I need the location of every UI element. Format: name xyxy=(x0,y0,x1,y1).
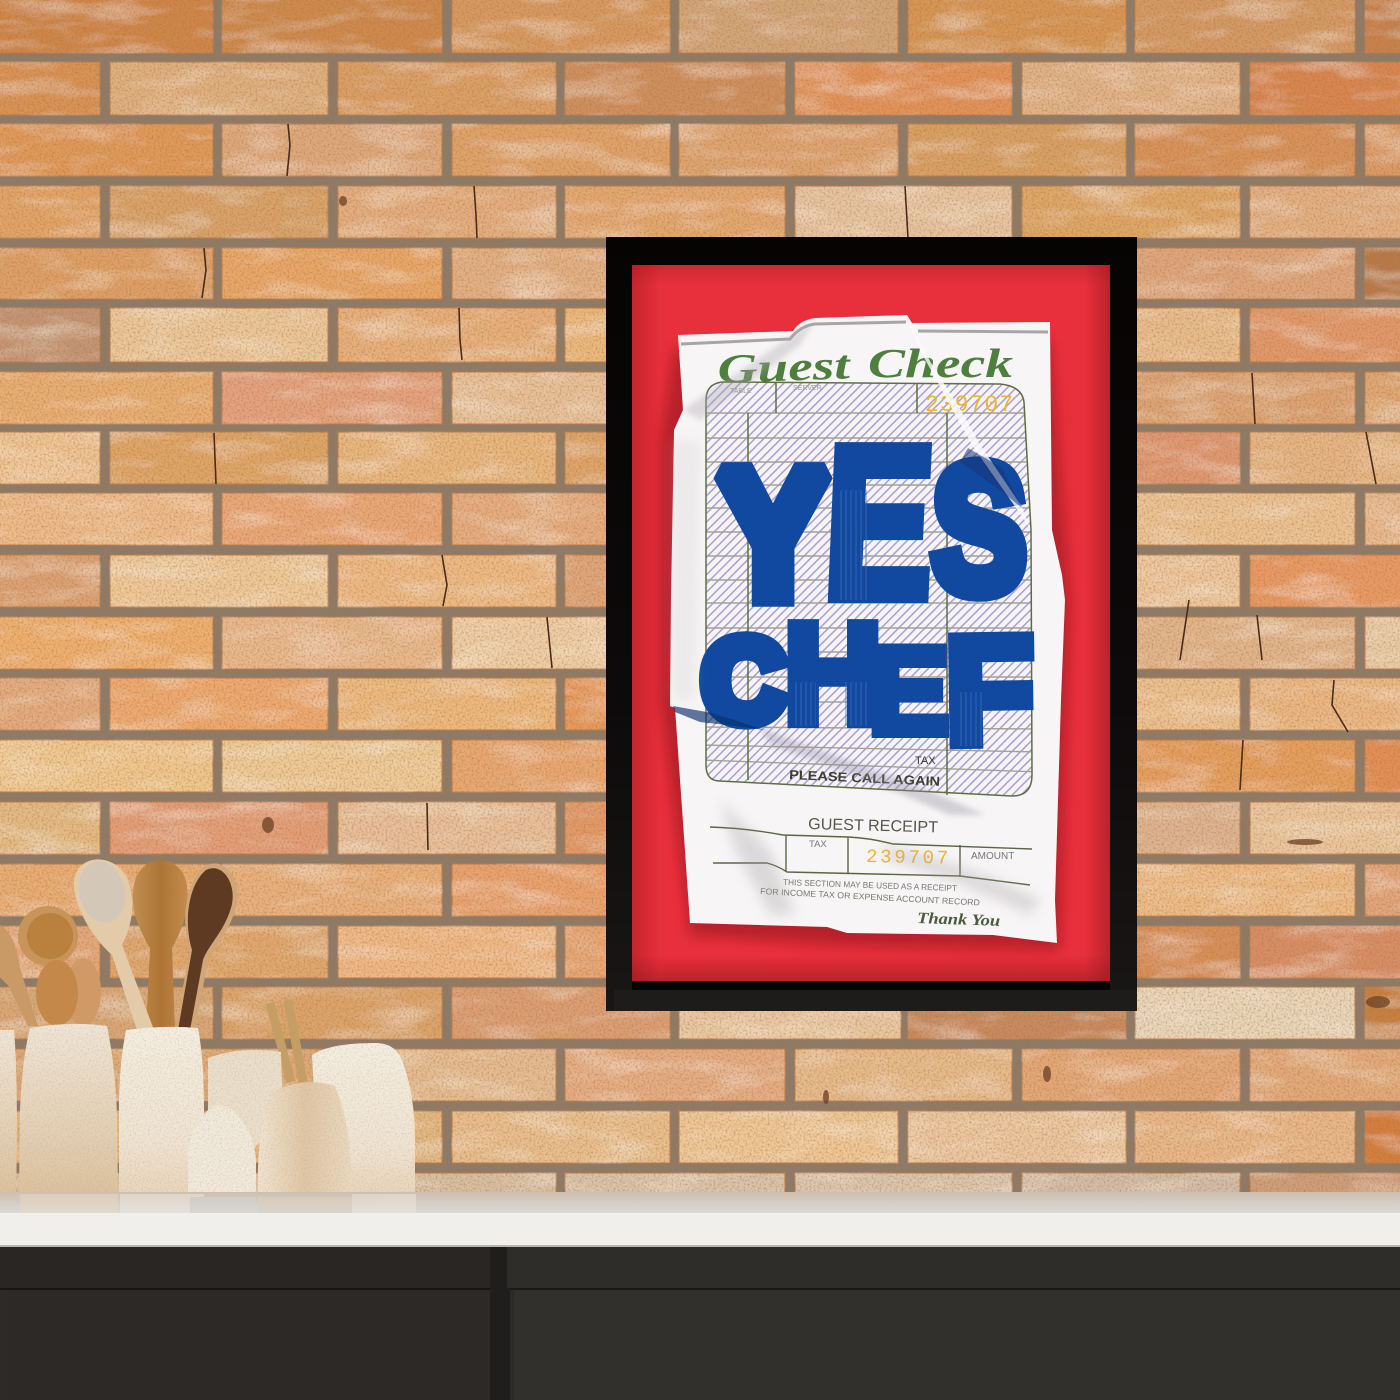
red backing board xyxy=(632,265,1110,981)
utensil: dark spoon xyxy=(175,863,238,1030)
jar: small tan front xyxy=(258,1082,352,1196)
CHEF lettering: F xyxy=(945,607,1035,775)
picture frame xyxy=(606,237,1137,1011)
YES lettering xyxy=(719,403,1026,643)
ceramic jars xyxy=(0,1024,415,1197)
YES lettering: E xyxy=(820,403,938,643)
utensil: rounded handles xyxy=(36,958,101,1026)
grid small column labels: SERVER xyxy=(793,385,822,392)
CHEF lettering: H xyxy=(785,596,881,752)
jar: far left sliver xyxy=(0,1030,17,1193)
utensil: far-left spoon xyxy=(0,924,38,1026)
utensil: wooden sticks xyxy=(270,1000,303,1082)
guest check heading xyxy=(717,340,1014,392)
receipt cell labels xyxy=(809,839,1014,862)
ink wear on letters xyxy=(792,490,983,746)
receipt fine print: THIS SECTION MAY BE USED AS A RECEIPT xyxy=(783,877,957,893)
receipt cell labels: TAX xyxy=(809,839,827,850)
ruled hatched order grid xyxy=(700,382,1040,796)
crumpled guest check paper xyxy=(660,315,1070,950)
receipt cell labels: AMOUNT xyxy=(971,851,1014,862)
CHEF lettering: E xyxy=(869,622,948,759)
grid small column labels xyxy=(730,385,822,395)
receipt fine print: FOR INCOME TAX OR EXPENSE ACCOUNT RECORD xyxy=(760,886,980,908)
receipt serial number: 239707 xyxy=(866,846,948,869)
thank you signature: Thank You xyxy=(917,910,1001,930)
CHEF lettering: C xyxy=(702,617,785,746)
receipt table xyxy=(710,827,1032,885)
grid small column labels: TABLE xyxy=(730,388,752,395)
jar: tall tan xyxy=(19,1024,118,1193)
tax label: TAX xyxy=(915,755,936,767)
guest check heading: Check xyxy=(868,340,1014,386)
jar: back centre xyxy=(208,1050,283,1193)
utensil: pale spoon xyxy=(72,856,154,1030)
guest check heading: Guest xyxy=(717,341,852,392)
countertop xyxy=(0,1192,1400,1247)
serial number stamp: 239707 xyxy=(925,392,1013,418)
YES lettering: Y xyxy=(719,435,827,635)
cabinet xyxy=(0,1247,1400,1400)
CHEF lettering xyxy=(702,596,1035,775)
guest receipt heading: GUEST RECEIPT xyxy=(808,816,939,836)
paper creases and shading xyxy=(672,316,1040,915)
jar: tall cream xyxy=(119,1027,205,1193)
receipt fine print xyxy=(760,877,980,908)
jar: small bullet xyxy=(188,1105,256,1197)
jar: back right xyxy=(312,1043,415,1192)
please call again line: PLEASE CALL AGAIN xyxy=(789,767,940,789)
YES lettering: S xyxy=(932,429,1026,630)
utensil: ladle xyxy=(18,906,78,966)
utensil: middle wooden spoon xyxy=(133,860,188,1030)
perforated header stripe xyxy=(681,322,1048,344)
wooden utensils xyxy=(0,856,303,1082)
